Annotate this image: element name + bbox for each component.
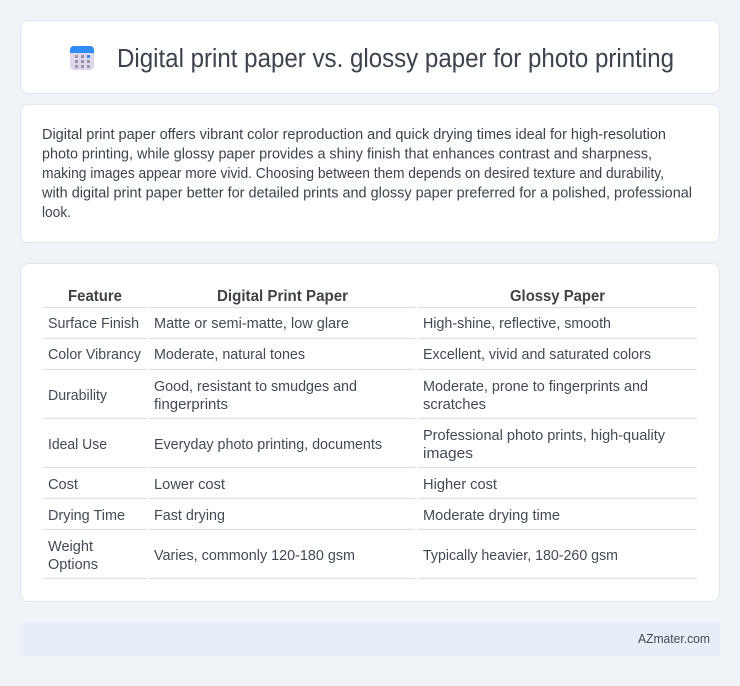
row: ideal use: Professional photo prints, high-quality [423,428,666,444]
row: weight options: Typically heavier, 180-260 gsm [423,548,618,564]
row: durability: Good, resistant to smudges and [154,379,357,395]
row: surface finish [48,316,611,332]
table header row [68,288,605,305]
row: color vibrancy: Moderate, natural tones [154,347,305,363]
row: durability: Moderate, prone to fingerprints and [423,379,648,395]
row: cost: Lower cost [154,477,225,493]
row: weight options: Options [48,557,98,573]
footer bar [20,622,720,656]
row: surface finish: Surface Finish [48,316,139,332]
row: ideal use: images [423,446,473,462]
row: ideal use: Everyday photo printing, documents [154,437,382,453]
row: ideal use [48,428,666,462]
row: weight options: Weight [48,539,93,555]
row: weight options [48,539,618,573]
text block: summary: photo printing, while glossy paper provides a shiny finish that enhances contrast and sharpness, [42,146,652,162]
row: drying time: Drying Time [48,508,125,524]
row: color vibrancy [48,347,651,363]
table header row: Digital Print Paper [217,288,348,305]
text block: summary: look. [42,205,71,221]
row: drying time [48,508,560,524]
row: surface finish: High-shine, reflective, smooth [423,316,611,332]
title: Digital print paper vs. glossy paper for photo printing [117,45,674,73]
footer credit: AZmater.com [638,632,710,646]
table header row: Feature [68,288,122,305]
text block: summary [41,127,692,221]
row: weight options: Varies, commonly 120-180 gsm [154,548,355,564]
row: surface finish: Matte or semi-matte, low glare [154,316,349,332]
row: cost [48,477,497,493]
panel: comparison table [20,264,720,602]
header panel [20,20,720,94]
row: color vibrancy: Excellent, vivid and saturated colors [423,347,651,363]
row: durability [48,379,648,413]
row: color vibrancy: Color Vibrancy [48,347,142,363]
row: cost: Higher cost [423,477,497,493]
text block: summary: making images appear more vivid. Choosing between them depends on desired texture and durability, [42,166,664,182]
panel: intro paragraph [20,104,720,242]
row: cost: Cost [48,477,78,493]
icon: calendar [70,46,94,70]
row: durability: scratches [423,397,486,413]
row: drying time: Fast drying [154,508,225,524]
text block: summary: with digital print paper better for detailed prints and glossy paper preferred for a polished, professional [41,186,692,202]
row: durability: fingerprints [154,397,228,413]
table header row: Glossy Paper [510,288,605,305]
row: drying time: Moderate drying time [423,508,560,524]
row: durability: Durability [48,388,108,404]
row: ideal use: Ideal Use [48,437,107,453]
text block: summary: Digital print paper offers vibrant color reproduction and quick drying times ideal for high-resolution [42,127,666,143]
